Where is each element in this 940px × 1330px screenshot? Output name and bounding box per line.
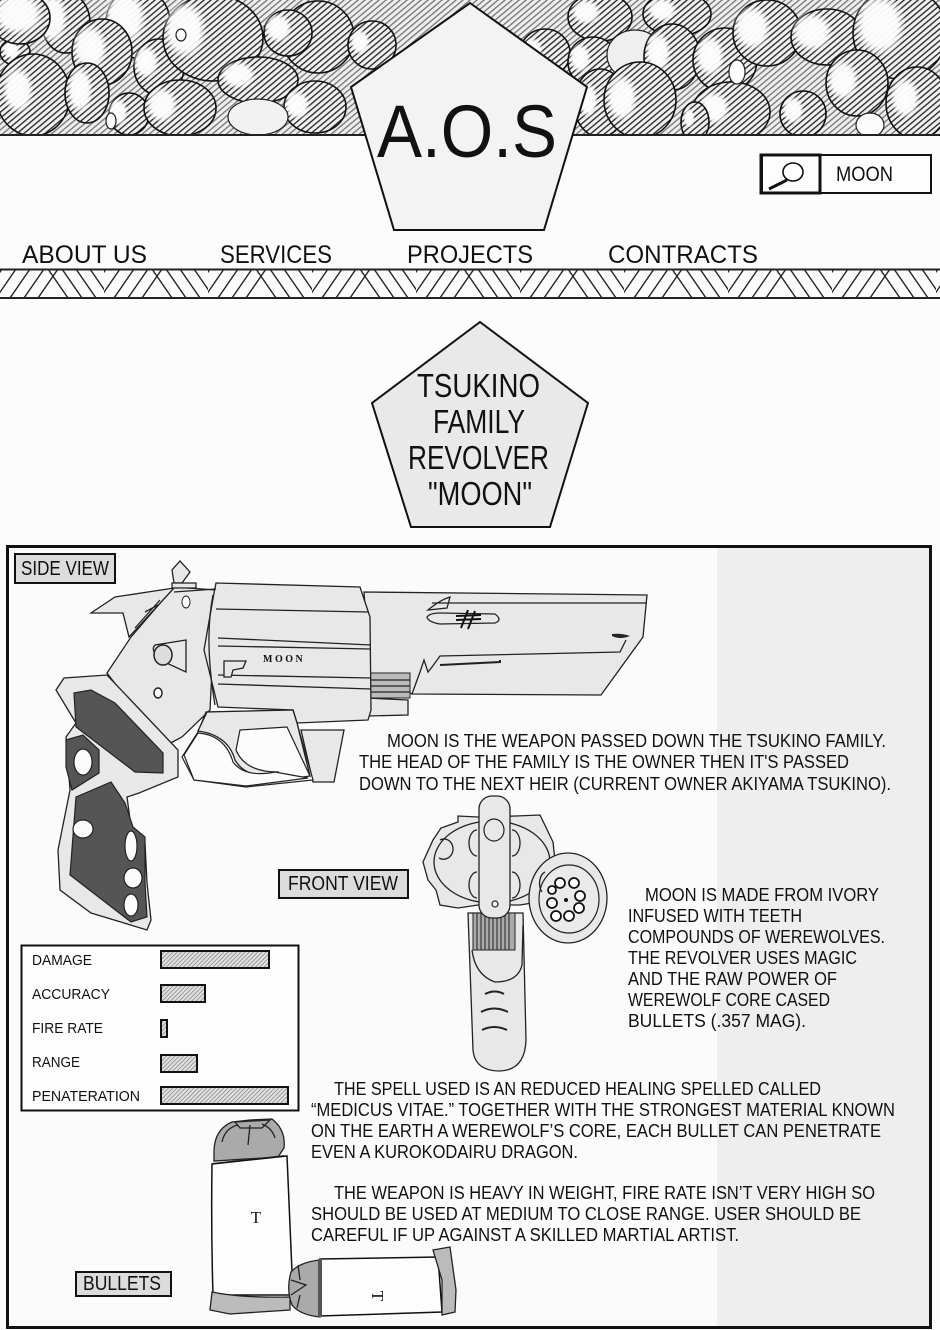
stat: penateration — [32, 1087, 288, 1105]
header band: hatched bubbles illustration — [0, 0, 940, 142]
paragraph: moon overview: THE HEAD OF THE FAMILY IS THE OWNER THEN IT'S PASSED — [359, 752, 849, 772]
paragraph: materials: INFUSED WITH TEETH — [628, 906, 802, 926]
stats panel — [22, 946, 298, 1110]
title pentagon — [372, 322, 588, 527]
stat: range — [32, 1054, 197, 1072]
paragraph: spell: EVEN A KUROKODAIRU DRAGON. — [311, 1142, 578, 1162]
stat: damage — [32, 951, 269, 969]
illustration: revolver side view — [56, 561, 647, 930]
navigation menu: ABOUT US — [22, 241, 147, 269]
icon: magnifying glass — [769, 163, 803, 189]
engraved name: MOON — [263, 654, 305, 665]
paragraph: materials: THE REVOLVER USES MAGIC — [628, 948, 857, 968]
label: side view — [15, 554, 115, 583]
stat: penateration: PENATERATION — [32, 1088, 140, 1105]
paragraph: materials: AND THE RAW POWER OF — [628, 969, 837, 989]
search box — [761, 155, 931, 193]
herringbone divider band — [0, 268, 940, 299]
stat: damage: DAMAGE — [32, 952, 92, 969]
paragraph: spell: ON THE EARTH A WEREWOLF’S CORE, EACH BULLET CAN PENETRATE — [311, 1121, 881, 1141]
paragraph: materials: COMPOUNDS OF WEREWOLVES. — [628, 927, 885, 947]
navigation menu: PROJECTS — [407, 241, 533, 269]
header divider line — [0, 134, 940, 136]
paragraph: materials: WEREWOLF CORE CASED — [628, 990, 830, 1010]
stat: fire rate — [32, 1020, 167, 1037]
paragraph: usage: THE WEAPON IS HEAVY IN WEIGHT, FIRE RATE ISN’T VERY HIGH SO — [334, 1183, 875, 1203]
navigation menu: CONTRACTS — [608, 241, 758, 269]
bullet mark: T — [368, 1291, 387, 1302]
paragraph: materials: BULLETS (.357 MAG). — [628, 1011, 806, 1031]
main panel — [8, 546, 930, 1328]
paragraph: usage — [311, 1183, 875, 1245]
label: bullets: BULLETS — [83, 1273, 161, 1295]
title pentagon: FAMILY — [433, 403, 525, 440]
paragraph: moon overview: DOWN TO THE NEXT HEIR (CURRENT OWNER AKIYAMA TSUKINO). — [359, 774, 891, 794]
stat: fire rate: FIRE RATE — [32, 1020, 103, 1037]
paragraph: usage: SHOULD BE USED AT MEDIUM TO CLOSE RANGE. USER SHOULD BE — [311, 1204, 861, 1224]
illustration: upright bullet — [210, 1119, 293, 1314]
illustration: revolver front view — [423, 796, 607, 1071]
logo text: A.O.S — [377, 90, 557, 173]
paragraph: materials: MOON IS MADE FROM IVORY — [645, 885, 879, 905]
title pentagon: "MOON" — [428, 475, 532, 512]
title pentagon: TSUKINO — [417, 367, 540, 404]
label: front view: FRONT VIEW — [288, 873, 398, 895]
paragraph: spell — [311, 1079, 895, 1162]
paragraph: spell: THE SPELL USED IS AN REDUCED HEALING SPELLED CALLED — [334, 1079, 821, 1099]
bullet mark: T — [251, 1208, 262, 1227]
paragraph: materials — [628, 885, 885, 1031]
stat: accuracy — [32, 985, 205, 1003]
stat: accuracy: ACCURACY — [32, 986, 110, 1003]
stat: range: RANGE — [32, 1054, 80, 1071]
paragraph: spell: “MEDICUS VITAE.” TOGETHER WITH THE STRONGEST MATERIAL KNOWN — [311, 1100, 895, 1120]
navigation menu — [22, 241, 758, 269]
search term: MOON — [836, 163, 893, 186]
paragraph: moon overview — [359, 731, 891, 794]
illustration: sideways bullet — [289, 1247, 456, 1317]
paragraph: usage: CAREFUL IF UP AGAINST A SKILLED MARTIAL ARTIST. — [311, 1225, 739, 1245]
navigation menu: SERVICES — [220, 241, 332, 269]
label: side view: SIDE VIEW — [21, 558, 109, 580]
title pentagon: REVOLVER — [408, 439, 549, 476]
logo pentagon — [351, 3, 587, 230]
paragraph: moon overview: MOON IS THE WEAPON PASSED DOWN THE TSUKINO FAMILY. — [387, 731, 886, 751]
